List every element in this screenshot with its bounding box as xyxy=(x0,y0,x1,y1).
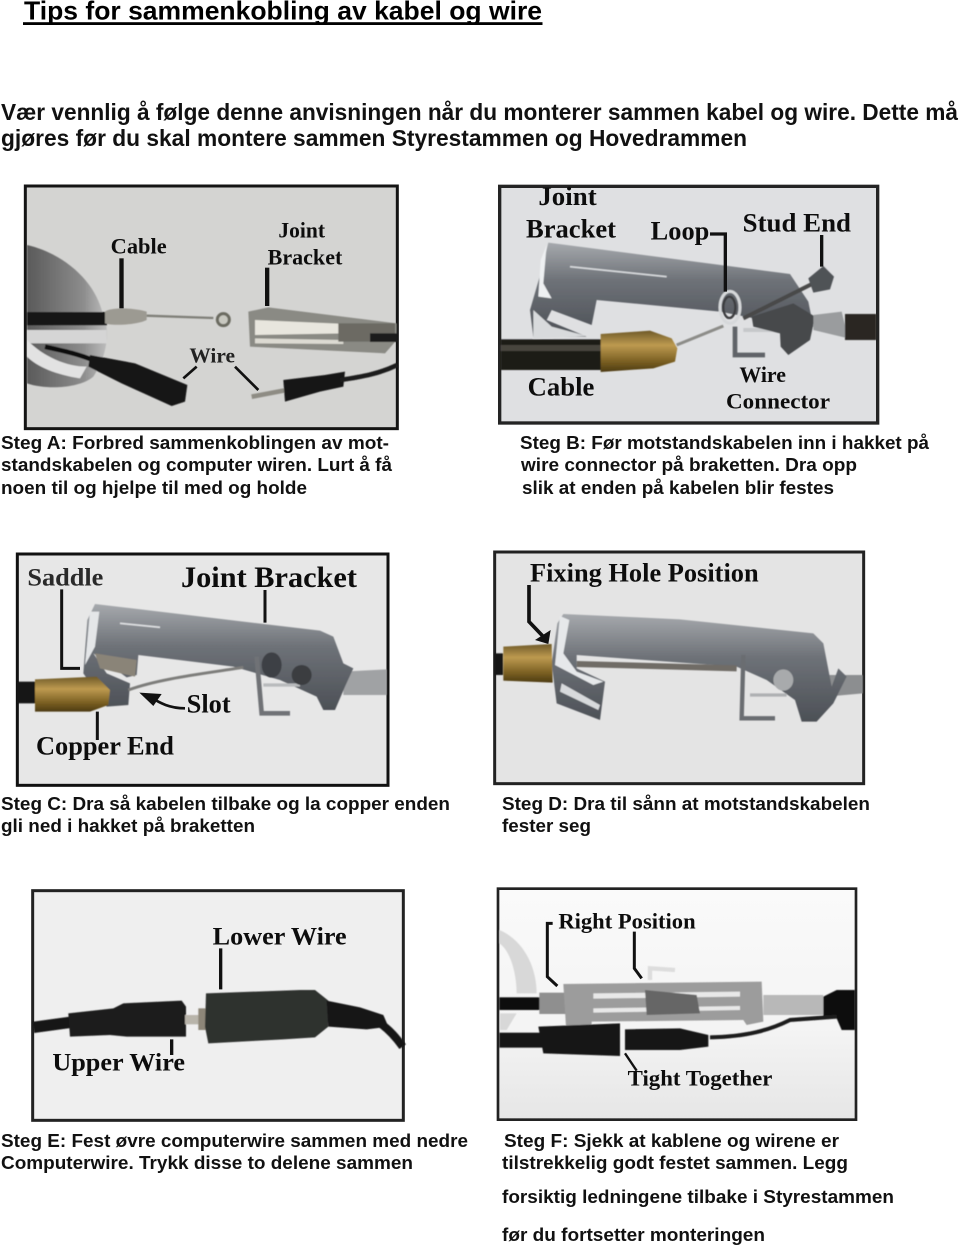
icon: brass end xyxy=(495,653,503,675)
icon: joint bracket xyxy=(552,614,847,722)
arrow: fixing hole xyxy=(529,585,551,644)
photo labels: Bracket xyxy=(526,214,616,243)
icon: right cable xyxy=(813,312,848,338)
caption: Steg E: Computerwire. Trykk disse to delene sammen xyxy=(1,1152,413,1173)
label lines xyxy=(172,948,221,1055)
caption: Steg C: Steg C: Dra så kabelen tilbake og la copper enden xyxy=(1,793,450,814)
photo labels: Stud End xyxy=(743,209,852,238)
caption: Steg D xyxy=(502,793,870,836)
caption: Steg F: før du fortsetter monteringen xyxy=(502,1224,765,1245)
photo labels xyxy=(558,908,773,1091)
icon: right rod xyxy=(827,675,863,697)
photo labels: Wire xyxy=(189,344,235,368)
intro text: Vær vennlig å følge denne anvisningen når du monterer sammen kabel og wire. Dette må xyxy=(1,99,958,125)
caption: Steg E xyxy=(1,1130,468,1173)
caption: Steg F: forsiktig ledningene tilbake i Styrestammen xyxy=(502,1186,894,1207)
icon: wire connector xyxy=(735,327,765,355)
icon: bottom wire plugs xyxy=(499,1017,837,1056)
caption: Steg B: slik at enden på kabelen blir festes xyxy=(522,477,834,498)
icon: left wire plug xyxy=(33,1001,186,1037)
photo labels: Joint Bracket xyxy=(181,562,357,594)
icon: cable xyxy=(501,339,604,370)
icon: lower wire plug xyxy=(205,990,403,1047)
caption: Steg F: Steg F: Sjekk at kablene og wirene er xyxy=(504,1130,839,1151)
photo F: right position and tight together xyxy=(498,889,856,1120)
photo labels: Joint xyxy=(538,182,597,211)
photo E: lower and upper wire xyxy=(33,891,403,1120)
caption: Steg B: Steg B: Før motstandskabelen inn i hakket på xyxy=(520,432,930,453)
photo A: cable, joint bracket and wire xyxy=(25,186,397,429)
photo labels: Connector xyxy=(726,389,830,414)
caption: Steg A: Steg A: Forbred sammenkoblingen av mot- xyxy=(1,432,389,453)
icon: connector xyxy=(257,657,290,713)
caption: Steg D: Steg D: Dra til sånn at motstandskabelen xyxy=(502,793,870,814)
photo labels xyxy=(27,562,357,761)
icon: left wire plug xyxy=(45,347,187,406)
caption: Steg E: Steg E: Fest øvre computerwire sammen med nedre xyxy=(1,1130,468,1151)
photo labels: Lower Wire xyxy=(213,923,347,951)
icon: joint bracket xyxy=(248,307,397,353)
caption: Steg F xyxy=(502,1130,894,1245)
icon: pin xyxy=(185,1008,208,1030)
photo labels: Right Position xyxy=(558,908,696,933)
label lines xyxy=(710,234,822,292)
photo labels: Loop xyxy=(651,216,709,245)
photo label: Fixing Hole Position xyxy=(530,559,759,588)
icon: brass end xyxy=(601,331,677,372)
caption: Steg B xyxy=(520,432,930,498)
intro text: gjøres før du skal montere sammen Styrestammen og Hovedrammen xyxy=(1,125,747,151)
photo labels xyxy=(526,182,852,414)
icon: hand xyxy=(27,245,107,387)
icon: right wire plug xyxy=(252,365,397,402)
icon: white ring xyxy=(499,930,537,1030)
icon: cable and copper end xyxy=(17,682,37,703)
icon: top cable and housing xyxy=(499,968,855,1030)
photo B: bracket with loop and stud end xyxy=(500,182,878,423)
icon: right rod xyxy=(343,669,387,695)
caption: Steg A: noen til og hjelpe til med og holde xyxy=(1,477,307,498)
photo labels: Cable xyxy=(528,373,594,402)
label lines xyxy=(119,258,269,308)
icon: joint bracket xyxy=(530,243,813,338)
photo labels: Wire xyxy=(739,363,786,387)
photo labels: Upper Wire xyxy=(52,1049,185,1077)
caption: Steg C xyxy=(1,793,450,836)
caption: Steg D: fester seg xyxy=(502,815,591,836)
arrows xyxy=(547,923,642,986)
photo labels: Saddle xyxy=(27,563,103,591)
arrow: slot xyxy=(139,693,185,708)
icon: cable wire xyxy=(577,664,737,668)
caption: Steg F: tilstrekkelig godt festet sammen. Legg xyxy=(502,1152,848,1173)
photo labels: Tight Together xyxy=(628,1066,773,1091)
caption: Steg B: wire connector på braketten. Dra opp xyxy=(520,454,857,475)
photo labels: Slot xyxy=(187,690,231,719)
photo labels: Joint xyxy=(278,219,326,243)
photo C: saddle, slot and copper end xyxy=(17,554,388,785)
photo labels xyxy=(111,219,343,368)
icon: cable with ferrule and wire end xyxy=(27,308,229,326)
photo labels xyxy=(52,923,347,1077)
caption: Steg A: standskabelen og computer wiren. Lurt å få xyxy=(1,454,393,475)
icon: wire xyxy=(128,667,243,690)
caption: Steg A xyxy=(1,432,393,498)
photo D: fixing hole position xyxy=(495,552,864,784)
label lines xyxy=(62,589,265,740)
icon: wire through loop to stud xyxy=(677,266,834,345)
intro text xyxy=(1,99,958,151)
photo labels: Cable xyxy=(111,233,167,258)
caption: Steg C: gli ned i hakket på braketten xyxy=(1,815,255,836)
photo labels: Copper End xyxy=(36,732,175,761)
photo labels: Bracket xyxy=(268,244,343,269)
icon: joint bracket xyxy=(83,604,353,710)
